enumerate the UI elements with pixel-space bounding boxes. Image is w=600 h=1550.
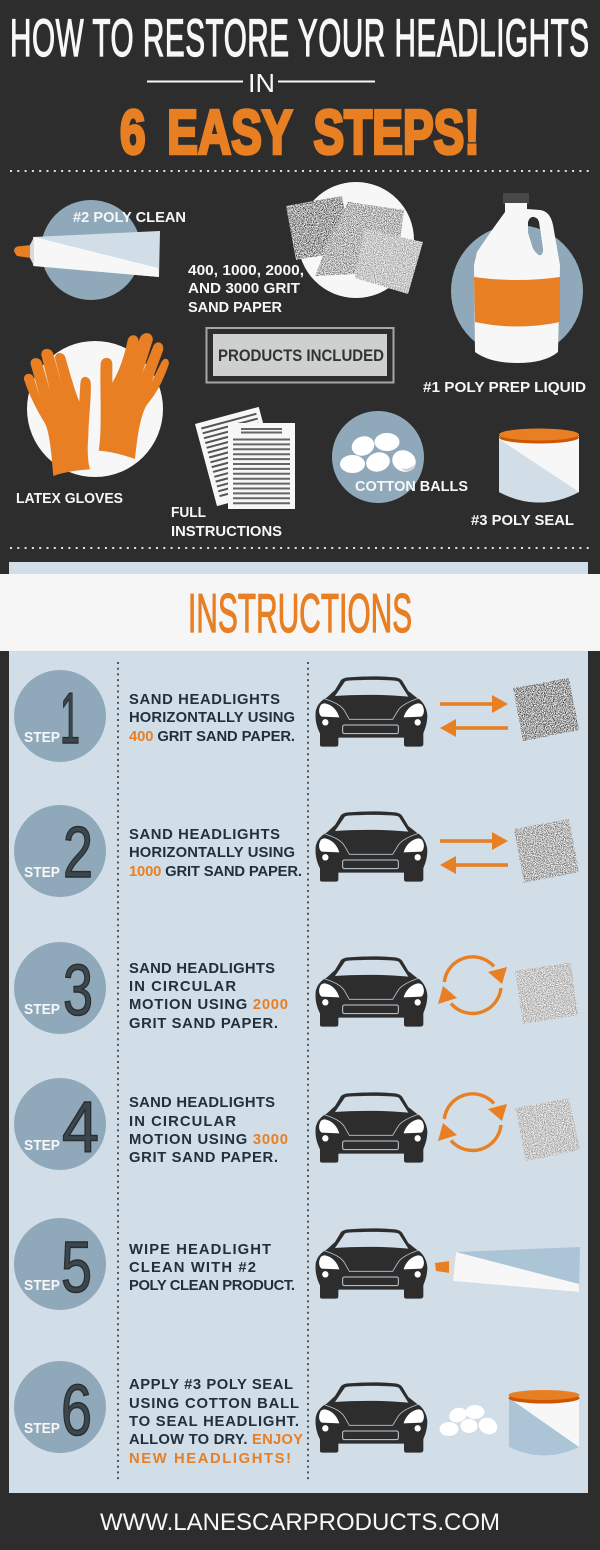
badge: step 5: 5: [61, 1228, 92, 1308]
text: step 3 instruction: [129, 961, 288, 1032]
label: poly seal: #3 POLY SEAL: [471, 513, 574, 529]
arrows: back and forth: [440, 832, 508, 874]
label: sand paper: [188, 263, 304, 316]
label: full instructions: [171, 505, 282, 540]
text: step 1 instruction: 400 GRIT SAND PAPER.: [129, 729, 295, 745]
icon: 2000 grit sand paper: [515, 962, 578, 1024]
icon: 3000 grit sand paper: [515, 1098, 580, 1161]
label: poly clean: #2 POLY CLEAN: [73, 210, 186, 226]
text: step 3 instruction: IN CIRCULAR: [129, 979, 236, 995]
panel: products included: [14, 182, 586, 540]
step 1: [14, 670, 579, 762]
text: step 4 instruction: IN CIRCULAR: [129, 1114, 236, 1130]
heading: instructions banner: INSTRUCTIONS: [188, 583, 412, 644]
badge: step 1: [14, 670, 106, 762]
badge: step 3: [14, 942, 106, 1034]
label: latex gloves: LATEX GLOVES: [16, 491, 123, 507]
heading: instructions banner: [0, 574, 600, 651]
badge: step 3: STEP: [24, 1002, 60, 1018]
heading: products included: [206, 328, 394, 382]
product: poly seal can: [471, 428, 579, 529]
badge: step 6: 6: [61, 1371, 92, 1451]
badge: step 1: 1: [60, 679, 80, 759]
icon: car: [316, 1092, 427, 1163]
text: step 4 instruction: MOTION USING 3000: [129, 1132, 288, 1148]
text: step 1 instruction: SAND HEADLIGHTS: [129, 692, 280, 708]
text: step 1 instruction: [129, 692, 295, 745]
arrows: circular motion: [438, 957, 507, 1013]
badge: step 4: [14, 1078, 106, 1170]
subtitle: in, with side rules: IN: [248, 68, 275, 98]
icon: car: [316, 811, 427, 882]
arrows: circular motion: [438, 1094, 507, 1150]
badge: step 6: [14, 1361, 106, 1453]
text: step 1 instruction: HORIZONTALLY USING: [129, 710, 295, 726]
text: step 2 instruction: 1000 GRIT SAND PAPER.: [129, 864, 302, 880]
badge: step 4: 4: [62, 1088, 99, 1168]
text: step 5 instruction: [129, 1242, 295, 1294]
product: sand paper: [188, 182, 423, 316]
heading: products included: PRODUCTS INCLUDED: [218, 347, 384, 365]
text: step 4 instruction: SAND HEADLIGHTS: [129, 1095, 275, 1111]
icon: poly seal can: [508, 1390, 580, 1456]
icon: cotton balls: [440, 1405, 500, 1437]
badge: step 3: 3: [63, 951, 93, 1031]
text: step 4 instruction: GRIT SAND PAPER.: [129, 1150, 278, 1166]
label: full instructions: INSTRUCTIONS: [171, 524, 282, 540]
badge: step 2: 2: [63, 813, 93, 893]
title: how to restore your headlights: HOW TO RESTORE YOUR HEADLIGHTS: [10, 9, 589, 68]
badge: step 2: STEP: [24, 865, 60, 881]
panel: instructions: [0, 562, 600, 1493]
text: step 6 instruction: NEW HEADLIGHTS!: [129, 1451, 291, 1467]
text: step 5 instruction: POLY CLEAN PRODUCT.: [129, 1278, 295, 1294]
badge: step 1: STEP: [24, 730, 60, 746]
step 5: [14, 1218, 580, 1310]
label: full instructions: FULL: [171, 505, 206, 521]
badge: step 5: [14, 1218, 106, 1310]
label: cotton balls: COTTON BALLS: [355, 479, 468, 495]
product: full instructions: [171, 407, 295, 540]
product: poly prep bottle: [423, 193, 586, 396]
text: step 6 instruction: ALLOW TO DRY. ENJOY: [129, 1432, 303, 1448]
step 4: [14, 1078, 580, 1170]
product: cotton balls: [332, 411, 468, 503]
badge: step 5: STEP: [24, 1278, 60, 1294]
step 2: [14, 805, 579, 897]
text: step 3 instruction: GRIT SAND PAPER.: [129, 1016, 278, 1032]
label: sand paper: AND 3000 GRIT: [188, 281, 300, 297]
label: sand paper: SAND PAPER: [188, 300, 283, 316]
label: poly prep liquid: #1 POLY PREP LIQUID: [423, 380, 586, 396]
badge: step 4: STEP: [24, 1138, 60, 1154]
icon: car: [316, 1382, 427, 1453]
text: step 2 instruction: HORIZONTALLY USING: [129, 845, 295, 861]
text: step 5 instruction: WIPE HEADLIGHT: [129, 1242, 271, 1258]
icon: 1000 grit sand paper: [514, 819, 579, 883]
title: 6 easy steps: 6 EASY STEPS!: [120, 98, 480, 167]
text: step 2 instruction: [129, 827, 302, 880]
text: step 4 instruction: [129, 1095, 288, 1166]
footer: website url: WWW.LANESCARPRODUCTS.COM: [100, 1509, 500, 1536]
text: step 5 instruction: CLEAN WITH #2: [129, 1260, 256, 1276]
text: step 3 instruction: SAND HEADLIGHTS: [129, 961, 275, 977]
text: step 3 instruction: MOTION USING 2000: [129, 997, 288, 1013]
title block: [10, 9, 589, 167]
badge: step 6: STEP: [24, 1421, 60, 1437]
icon: 400 grit sand paper: [513, 678, 579, 741]
icon: car: [316, 676, 427, 747]
icon: car: [316, 1228, 427, 1299]
arrows: back and forth: [440, 695, 508, 737]
label: sand paper: 400, 1000, 2000,: [188, 263, 304, 279]
product: latex gloves: [16, 333, 169, 507]
product: poly clean tube: [14, 200, 186, 300]
text: step 6 instruction: [129, 1377, 303, 1467]
text: step 6 instruction: TO SEAL HEADLIGHT.: [129, 1414, 299, 1430]
step 6: [14, 1361, 580, 1467]
text: step 6 instruction: APPLY #3 POLY SEAL: [129, 1377, 293, 1393]
text: step 6 instruction: USING COTTON BALL: [129, 1396, 299, 1412]
icon: poly clean tube: [435, 1247, 580, 1292]
text: step 2 instruction: SAND HEADLIGHTS: [129, 827, 280, 843]
badge: step 2: [14, 805, 106, 897]
icon: car: [316, 956, 427, 1027]
step 3: [14, 942, 578, 1034]
